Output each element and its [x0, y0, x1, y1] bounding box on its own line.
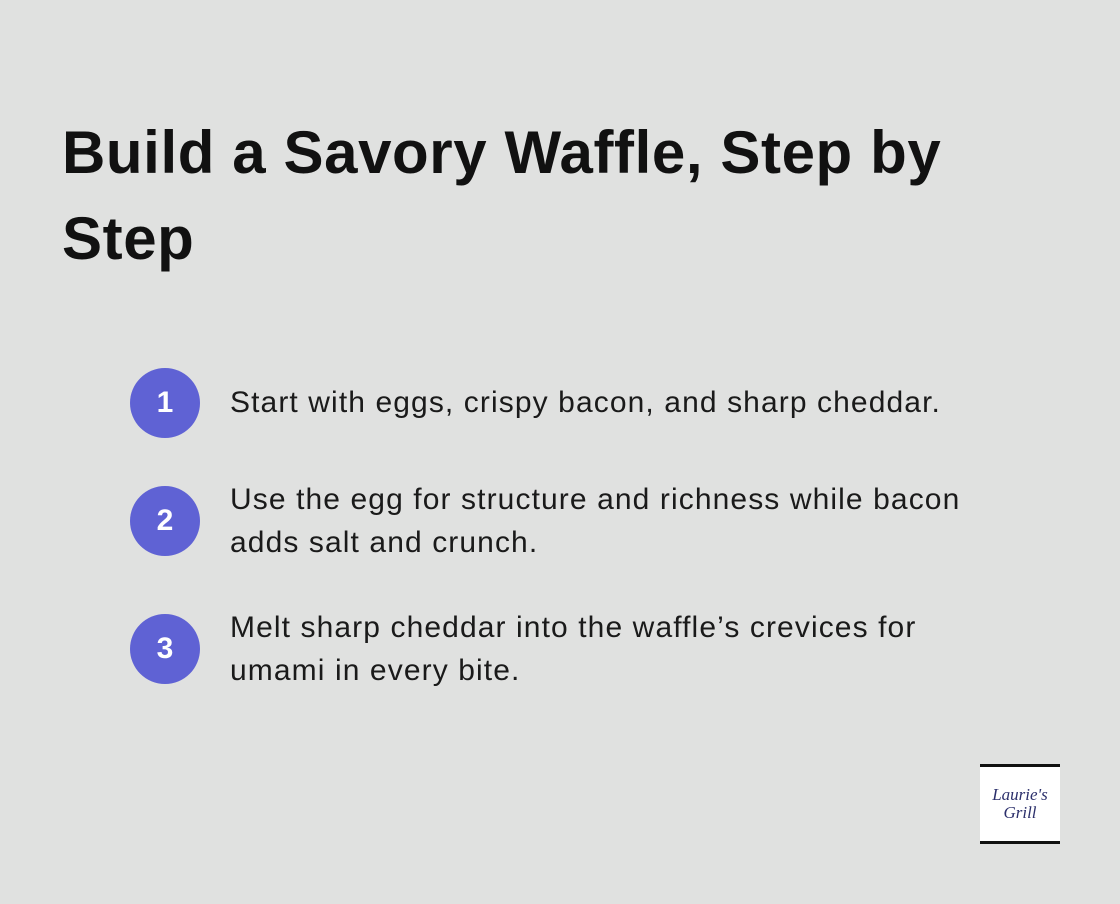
circle 1: 1	[157, 386, 173, 419]
circle 2	[130, 486, 200, 556]
text 2: Use the egg for structure and richness while bacon adds salt and crunch.	[230, 483, 960, 559]
step 1	[130, 368, 941, 438]
title: Build a Savory Waffle, Step by Step	[62, 119, 941, 272]
text 3: Melt sharp cheddar into the waffle’s crevices for umami in every bite.	[230, 611, 916, 687]
circle 3: 3	[157, 632, 173, 665]
circle 3	[130, 614, 200, 684]
logo: Laurie's	[992, 785, 1048, 804]
logo: Grill	[1003, 803, 1037, 822]
logo	[980, 764, 1060, 844]
step 3	[130, 611, 916, 687]
text 1: Start with eggs, crispy bacon, and sharp cheddar.	[230, 386, 941, 419]
circle 1	[130, 368, 200, 438]
circle 2: 2	[157, 504, 173, 537]
step 2	[130, 483, 960, 559]
